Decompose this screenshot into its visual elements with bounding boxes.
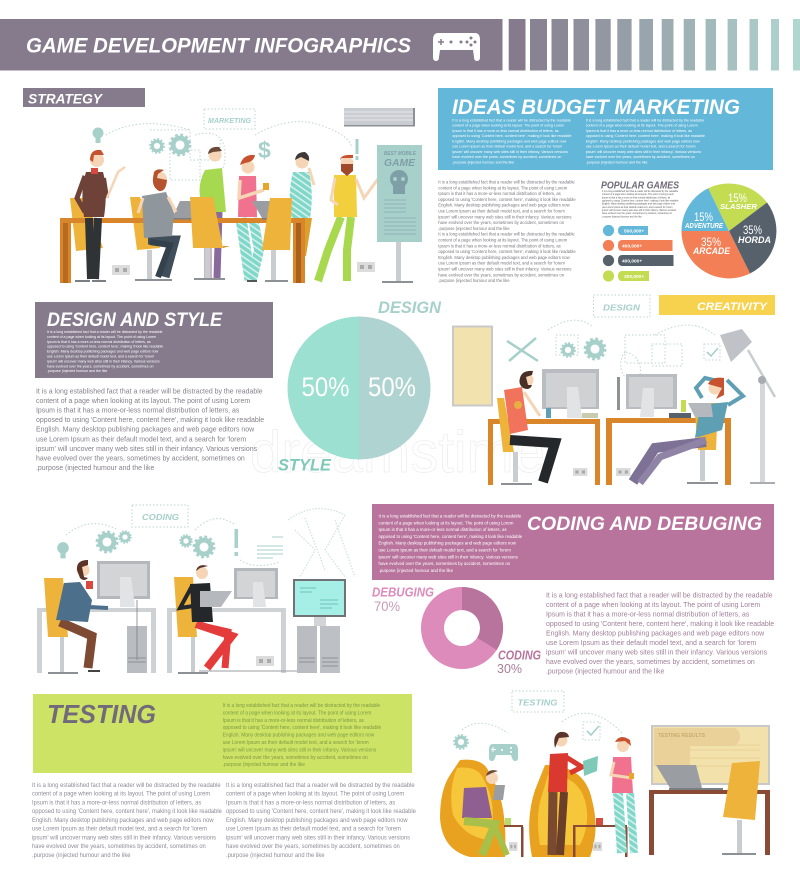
description: English. Many desktop publishing packages and web page editors now — [602, 203, 675, 206]
text block: .purpose (injected humour and the like — [378, 568, 454, 573]
icon: gear — [454, 735, 468, 749]
text block: ideas body: It is a long established fact that a reader will be distracted by the readable — [438, 232, 575, 237]
person 6 — [318, 155, 394, 281]
text block right: English. Many desktop publishing packages and web page editors now — [586, 139, 700, 144]
text block: design body: English. Many desktop publishing packages and web page editors now — [36, 424, 255, 434]
text block: ideas body: ipsum' will uncover many web sites still in their infancy. Various versions — [438, 266, 572, 272]
text block right: It is a long established fact that a reader will be distracted by the readable — [586, 118, 704, 123]
design label box: DESIGN — [603, 302, 641, 312]
desk — [649, 790, 770, 855]
popular games block — [601, 180, 679, 282]
towers — [297, 626, 340, 673]
text block: opposed to using 'Content here, content here', making it look like readable — [47, 345, 163, 349]
text block: testing right: .purpose (injected humour and the like — [226, 853, 325, 859]
coding label — [132, 505, 188, 527]
text block: use Lorem Ipsum as their default model text, and a search for 'lorem — [223, 740, 369, 746]
programmer 2 — [174, 565, 232, 674]
text block: have evolved over the years, sometimes by accident, sometimes on — [378, 561, 511, 566]
banner stand: BEST MOBILE — [384, 151, 417, 157]
text block: ideas body: use Lorem Ipsum as their default model text, and a search for 'lorem — [438, 208, 565, 214]
text block: coding body: have evolved over the years, sometimes by accident, sometimes on — [546, 657, 755, 666]
text block: design body: .purpose (injected humour and the like — [36, 463, 154, 472]
text block: testing left: have evolved over the years, sometimes by accident, sometimes on — [32, 844, 206, 850]
legend: 300,000+ — [624, 274, 644, 280]
text block: ideas body: content of a page when looking at its layout. The point of using Lorem — [438, 237, 568, 243]
bean bag 2 — [529, 765, 596, 857]
text block: ideas body: ipsum' will uncover many web sites still in their infancy. Various versions — [438, 214, 572, 219]
text block: testing left: ipsum' will uncover many web sites still in their infancy. Various versions — [32, 835, 216, 842]
text block: design body: content of a page when looking at its layout. The point of using Lorem — [36, 396, 250, 405]
tower 1 — [127, 600, 147, 673]
legend: 400,000+ — [622, 243, 642, 249]
text block: opposed to using 'Content here, content here', making it look like readable — [378, 534, 523, 539]
text block: testing right: Ipsum is that it has a more-or-less normal distribution of letters, as — [226, 800, 395, 807]
text block right: content of a page when looking at its layout. The point of using Lorem — [586, 124, 698, 128]
text block: It is a long established fact that a reader will be distracted by the readable — [378, 513, 522, 519]
text block: ideas body: English. Many desktop publishing packages and web page editors now — [438, 255, 570, 260]
icon: gamepad — [489, 744, 518, 761]
monitor 2 — [234, 568, 278, 607]
text block: ideas body: It is a long established fact that a reader will be distracted by the readable — [438, 179, 575, 185]
text block right: have evolved over the years, sometimes by accident, sometimes on — [586, 155, 695, 159]
text block: English. Many desktop publishing packages and web page editors now — [47, 349, 158, 354]
watermark: dreamstime — [250, 420, 545, 485]
text block: testing left: English. Many desktop publishing packages and web page editors now — [32, 818, 214, 824]
description: opposed to using 'Content here, content here', making it look like readable — [602, 199, 679, 203]
text block: ideas body: opposed to using 'Content here, content here', making it look like readable — [438, 197, 576, 202]
icon: document lines — [257, 537, 283, 558]
icon: crossed tools — [507, 338, 538, 361]
icon: exclamation — [356, 139, 358, 160]
text block: opposed to using 'Content here, content here', making it look like readable — [223, 725, 381, 731]
chair — [722, 761, 760, 855]
coding label: CODING — [142, 512, 179, 522]
text block: coding body: opposed to using 'Content here, content here', making it look like readable — [546, 619, 774, 628]
label: debuging 70%: 70% — [374, 599, 400, 614]
air conditioner — [344, 108, 415, 126]
dashed fighters outline — [288, 509, 355, 577]
label: coding 30%: CODING — [498, 648, 541, 662]
text block: ipsum' will uncover many web sites still in their infancy. Various versions — [223, 747, 377, 753]
header stripes — [509, 19, 800, 70]
text block left: use Lorem Ipsum as their default model text, and a search for 'lorem — [452, 145, 562, 149]
icon: exclamation — [234, 529, 238, 556]
text block: content of a page when looking at its layout. The point of using Lorem — [47, 335, 156, 339]
text block: ideas body: have evolved over the years, sometimes by accident, sometimes on — [438, 220, 565, 225]
heading: POPULAR GAMES — [601, 180, 679, 192]
icon: bulb — [57, 542, 69, 558]
text block: ipsum' will uncover many web sites still in their infancy. Various versions — [47, 359, 160, 363]
description: have evolved over the years, sometimes by accident, sometimes on — [602, 212, 673, 215]
text block: design body: Ipsum is that it has a more-or-less normal distribution of letters, as — [36, 405, 240, 415]
text block right: .purpose (injected humour and the like — [586, 160, 648, 165]
text block: ipsum' will uncover many web sites still in their infancy. Various versions — [378, 554, 518, 559]
text block: use Lorem Ipsum as their default model text, and a search for 'lorem — [378, 547, 511, 553]
socket — [256, 656, 274, 666]
description: content of a page when looking at its layout. The point of using Lorem — [602, 193, 674, 196]
pie chart: popular games: 15% — [728, 193, 747, 205]
text block: coding body: Ipsum is that it has a more-or-less normal distribution of letters, as — [546, 609, 750, 619]
text block: English. Many desktop publishing packages and web page editors now — [378, 541, 517, 546]
pie chart: popular games: SLASHER — [720, 202, 758, 211]
marketing label — [204, 109, 255, 129]
text block: ideas body: .purpose (injected humour and the like — [438, 226, 510, 231]
creativity tag: CREATIVITY — [697, 301, 769, 313]
panel: ideas budget marketing — [438, 88, 773, 170]
text block left: content of a page when looking at its layout. The point of using Lorem — [452, 124, 564, 128]
description: use Lorem Ipsum as their default model text, and a search for 'lorem — [602, 206, 673, 209]
text block: design body: use Lorem Ipsum as their default model text, and a search for 'lorem — [36, 434, 246, 443]
results board: TESTING RESULTS — [658, 733, 706, 739]
testing label — [512, 691, 564, 712]
laptops — [158, 201, 287, 220]
illustration: testing team — [440, 691, 770, 857]
heading: DESIGN AND STYLE — [47, 310, 223, 331]
sockets — [112, 262, 375, 275]
text block: ideas body: opposed to using 'Content here, content here', making it look like readable — [438, 249, 576, 254]
header banner — [0, 19, 502, 70]
heading: TESTING — [47, 699, 156, 729]
text block: ideas body: content of a page when looking at its layout. The point of using Lorem — [438, 185, 568, 190]
legend — [603, 225, 674, 282]
monitor 1 — [97, 561, 150, 607]
floor lamp — [720, 329, 775, 484]
icon: dollar: $ — [258, 137, 271, 163]
pie chart: popular games: HORDA — [738, 235, 771, 245]
banner stand: GAME — [384, 157, 416, 169]
label: coding 30% — [497, 648, 541, 676]
text block left: have evolved over the years, sometimes by accident, sometimes on — [452, 155, 561, 159]
monitors — [542, 369, 677, 418]
text block left: It is a long established fact that a reader will be distracted by the readable — [452, 118, 571, 123]
pie chart: popular games: 15% — [694, 212, 713, 224]
pie chart: popular games: ARCADE — [692, 246, 731, 256]
text block left: ipsum' will uncover many web sites still in their infancy. Various versions — [452, 150, 568, 154]
text block: design body: ipsum' will uncover many web sites still in their infancy. Various versions — [36, 444, 257, 453]
icon: checkbox — [704, 344, 720, 360]
text block: testing left: It is a long established fact that a reader will be distracted by the readable — [32, 783, 221, 789]
text block right: ipsum' will uncover many web sites still in their infancy. Various versions — [586, 150, 701, 154]
text block left: English. Many desktop publishing packages and web page editors now — [452, 139, 567, 144]
text block: testing right: opposed to using 'Content here, content here', making it look like readable — [226, 809, 416, 815]
text block: testing left: Ipsum is that it has a more-or-less normal distribution of letters, as — [32, 800, 201, 807]
pie chart: design vs style — [288, 316, 430, 460]
pie chart: popular games: 35% — [743, 225, 762, 237]
text block: ideas body: English. Many desktop publishing packages and web page editors now — [438, 203, 570, 208]
desks — [37, 608, 286, 673]
pie chart: popular games: 35% — [701, 237, 721, 249]
text block: ideas body: Ipsum is that it has a more-or-less normal distribution of letters, as — [438, 191, 562, 196]
text block left: .purpose (injected humour and the like — [452, 160, 514, 165]
label: style: STYLE — [278, 456, 332, 474]
icon: gamepad — [433, 33, 480, 61]
side table 2 — [573, 818, 628, 857]
desks — [488, 418, 731, 485]
results board — [652, 726, 769, 784]
marketing label: MARKETING — [208, 116, 251, 125]
text block: coding body: English. Many desktop publishing packages and web page editors now — [546, 628, 765, 638]
description: .purpose (injected humour and the like — [602, 215, 642, 218]
wall frame — [453, 326, 492, 406]
text block: testing left: .purpose (injected humour and the like — [32, 853, 131, 859]
label: debuging 70%: DEBUGING — [372, 586, 434, 600]
panel: coding and debuging — [372, 504, 774, 580]
icon: gears — [561, 339, 605, 359]
text block left: opposed to using 'Content here, content here', making it look like readable — [452, 134, 572, 138]
icon: checkbox — [583, 722, 600, 740]
label: coding 30%: 30% — [497, 661, 522, 676]
sockets — [573, 468, 630, 476]
text block: testing right: It is a long established fact that a reader will be distracted by the readable — [226, 783, 415, 789]
man in pink — [611, 737, 634, 853]
desk items — [546, 400, 691, 418]
description: Ipsum is that it has a more-or-less normal distribution of letters, as — [602, 196, 671, 199]
person 4 — [238, 155, 269, 282]
text block right: Ipsum is that it has a more-or-less normal distribution of letters, as — [586, 129, 692, 133]
person 2 — [138, 169, 176, 277]
pie chart: popular games — [682, 183, 776, 278]
text block: coding body: It is a long established fact that a reader will be distracted by the readable — [546, 590, 773, 600]
text block: design body: It is a long established fact that a reader will be distracted by the readable — [36, 386, 263, 395]
legend: 400,000+ — [622, 258, 642, 264]
illustration: design team — [453, 320, 775, 485]
banner stand — [377, 145, 422, 283]
text block: use Lorem Ipsum as their default model text, and a search for 'lorem — [47, 354, 154, 359]
conference table — [60, 218, 305, 283]
legend: 500,000+ — [624, 228, 644, 234]
design label box — [594, 295, 650, 317]
description: ipsum' will uncover many web sites still in their infancy. Various versions — [602, 209, 677, 212]
text block: .purpose (injected humour and the like — [47, 369, 107, 373]
text block: testing left: content of a page when looking at its layout. The point of using Lorem — [32, 792, 210, 798]
text block: coding body: ipsum' will uncover many web sites still in their infancy. Various versions — [546, 647, 767, 657]
text block: ideas body: .purpose (injected humour and the like — [438, 278, 510, 283]
text block: coding body: use Lorem Ipsum as their default model text, and a search for 'lorem — [546, 638, 756, 647]
bean bag tester — [440, 760, 507, 857]
pie chart: popular games: ADVENTURE — [684, 223, 723, 230]
designer at desk — [497, 371, 555, 485]
donut chart — [432, 587, 503, 658]
text block: testing right: have evolved over the years, sometimes by accident, sometimes on — [226, 844, 400, 850]
text block: design body: have evolved over the years, sometimes by accident, sometimes on — [36, 453, 245, 463]
text block: English. Many desktop publishing packages and web page editors now — [223, 732, 375, 739]
pie chart: design vs style: 50% — [302, 372, 350, 402]
text block: content of a page when looking at its layout. The point of using Lorem — [378, 520, 514, 525]
text block right: opposed to using 'Content here, content here', making it look like readable — [586, 134, 705, 138]
text block: It is a long established fact that a reader will be distracted by the readable — [47, 330, 163, 334]
text block: Ipsum is that it has a more-or-less normal distribution of letters, as — [223, 718, 364, 724]
text block: have evolved over the years, sometimes by accident, sometimes on — [47, 364, 153, 368]
side table 1 — [504, 818, 524, 857]
creativity tag — [659, 295, 775, 315]
text block: ideas body: have evolved over the years, sometimes by accident, sometimes on — [438, 272, 565, 277]
text block left: Ipsum is that it has a more-or-less normal distribution of letters, as — [452, 129, 559, 133]
text block: testing left: use Lorem Ipsum as their default model text, and a search for 'lorem — [32, 827, 207, 833]
text block: .purpose (injected humour and the like — [223, 762, 305, 768]
heading: IDEAS BUDGET MARKETING — [452, 96, 740, 119]
text block: ideas body: Ipsum is that it has a more-or-less normal distribution of letters, as — [438, 243, 562, 248]
text block: testing left: opposed to using 'Content here, content here', making it look like readable — [32, 809, 222, 815]
text block: design body: opposed to using 'Content here, content here', making it look like readable — [36, 415, 264, 424]
text block: ideas body: use Lorem Ipsum as their default model text, and a search for 'lorem — [438, 261, 565, 266]
label: design: DESIGN — [378, 298, 442, 317]
title: GAME DEVELOPMENT INFOGRAPHICS — [26, 34, 411, 57]
icon: gears — [150, 135, 190, 155]
text block: It is a long established fact that a reader will be distracted by the readable — [223, 703, 380, 709]
text block right: use Lorem Ipsum as their default model text, and a search for 'lorem — [586, 145, 696, 149]
heading: CODING AND DEBUGING — [527, 514, 762, 535]
illustration: strategy meeting — [60, 108, 422, 283]
laptop — [656, 765, 723, 790]
text block: Ipsum is that it has a more-or-less normal distribution of letters, as — [47, 340, 151, 344]
text block: have evolved over the years, sometimes by accident, sometimes on — [223, 755, 368, 761]
designer reclining — [633, 378, 743, 484]
text block: testing right: ipsum' will uncover many web sites still in their infancy. Various versions — [226, 835, 410, 842]
chairs behind — [70, 197, 172, 281]
text block: coding body: .purpose (injected humour and the like — [546, 666, 664, 676]
text block: testing right: use Lorem Ipsum as their default model text, and a search for 'lorem — [226, 827, 401, 833]
strategy tag — [23, 88, 145, 107]
person 3 — [200, 147, 226, 278]
icons: gears — [97, 531, 214, 557]
person 1 — [75, 150, 125, 281]
panel: testing — [33, 694, 412, 773]
icon: light bulb — [92, 128, 104, 143]
illustration: coding team — [37, 505, 355, 674]
text block: coding body: content of a page when looking at its layout. The point of using Lorem — [546, 600, 760, 609]
text block: testing right: English. Many desktop publishing packages and web page editors now — [226, 818, 408, 824]
front chairs — [190, 197, 292, 282]
text block: testing right: content of a page when looking at its layout. The point of using Lorem — [226, 792, 404, 798]
monitor 3 with code — [293, 579, 346, 626]
programmer 1 — [44, 560, 108, 674]
text block: content of a page when looking at its layout. The point of using Lorem — [223, 710, 371, 716]
testing label: TESTING — [518, 698, 558, 708]
strategy tag: STRATEGY — [28, 92, 104, 106]
text block: Ipsum is that it has a more-or-less normal distribution of letters, as — [378, 527, 507, 532]
pie chart: design vs style: 50% — [368, 372, 416, 402]
woman with tablet — [548, 732, 598, 855]
description: It is a long established fact that a reader will be distracted by the readable — [602, 190, 679, 193]
label: debuging 70% — [372, 586, 434, 614]
person 5 — [290, 152, 314, 256]
panel: design and style — [35, 302, 273, 378]
